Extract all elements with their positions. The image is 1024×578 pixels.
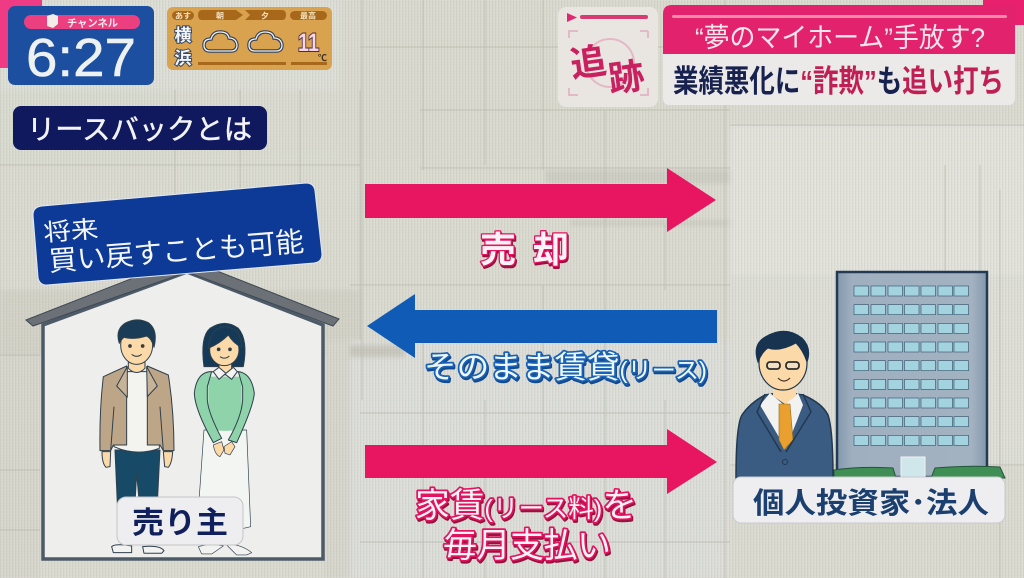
investor and building — [733, 272, 1005, 523]
house body — [43, 272, 323, 559]
callout: can buy back later — [33, 183, 322, 285]
label: monthly rent: 家賃(リース料)を — [415, 487, 637, 525]
badge: tracking: 跡 — [606, 55, 647, 100]
time: 6:27 — [26, 28, 136, 88]
headline bottom — [663, 54, 1015, 105]
callout: can buy back later: 買い戻すことも可能 — [47, 226, 305, 277]
weather baseline bars — [198, 62, 327, 65]
weather header pills: あす — [175, 12, 191, 20]
man — [100, 320, 174, 553]
weather panel — [167, 7, 332, 70]
seller house — [26, 258, 339, 559]
building — [834, 272, 1005, 479]
arrow: lease back to seller — [367, 294, 717, 358]
arrow: sale to investor — [365, 168, 716, 232]
building door — [901, 457, 925, 479]
weather header pills: 朝 — [216, 10, 224, 20]
callout: can buy back later: 将来 — [42, 216, 99, 247]
channel pill: チャンネル — [67, 18, 118, 30]
woman — [194, 323, 254, 555]
label: individual investors and corporations: 個人投資家･法人 — [753, 487, 989, 520]
headline bottom: 業績悪化に“詐欺”も追い打ち — [673, 64, 1004, 99]
businessman — [736, 331, 833, 478]
icon: clouds — [204, 32, 282, 51]
high temperature: ℃ — [318, 53, 327, 63]
location: 浜 — [174, 49, 192, 68]
badge: tracking — [558, 7, 658, 107]
high temperature: 11 — [298, 29, 319, 57]
label: monthly rent — [415, 487, 637, 565]
arrow: rent to investor — [365, 429, 717, 494]
clock panel — [8, 6, 154, 88]
label: lease as is: そのまま賃貸 (リース) — [424, 350, 707, 385]
weather header pills: 夕 — [261, 10, 269, 20]
house roof — [26, 258, 339, 326]
location — [174, 26, 192, 68]
weather header pills: 最高 — [300, 10, 316, 20]
headline top — [663, 5, 1015, 55]
weather header pills — [172, 10, 327, 20]
label: sale: 売却 — [480, 229, 569, 270]
hedges — [834, 466, 1005, 478]
headline top: “夢のマイホーム”手放す? — [695, 23, 985, 53]
headline banner — [663, 0, 1024, 105]
channel pill — [24, 14, 140, 30]
pink corner strip — [0, 0, 42, 68]
heading: what is leaseback — [13, 106, 267, 150]
heading: what is leaseback: リースバックとは — [27, 114, 252, 145]
man and woman illustration — [100, 320, 254, 555]
label: seller: 売り主 — [132, 507, 228, 540]
location: 横 — [174, 26, 192, 45]
label: monthly rent: 毎月支払い — [443, 527, 611, 565]
label: seller — [117, 497, 243, 545]
badge: tracking: 追 — [568, 40, 609, 85]
label: individual investors and corporations — [733, 477, 1005, 523]
building windows — [854, 286, 968, 445]
